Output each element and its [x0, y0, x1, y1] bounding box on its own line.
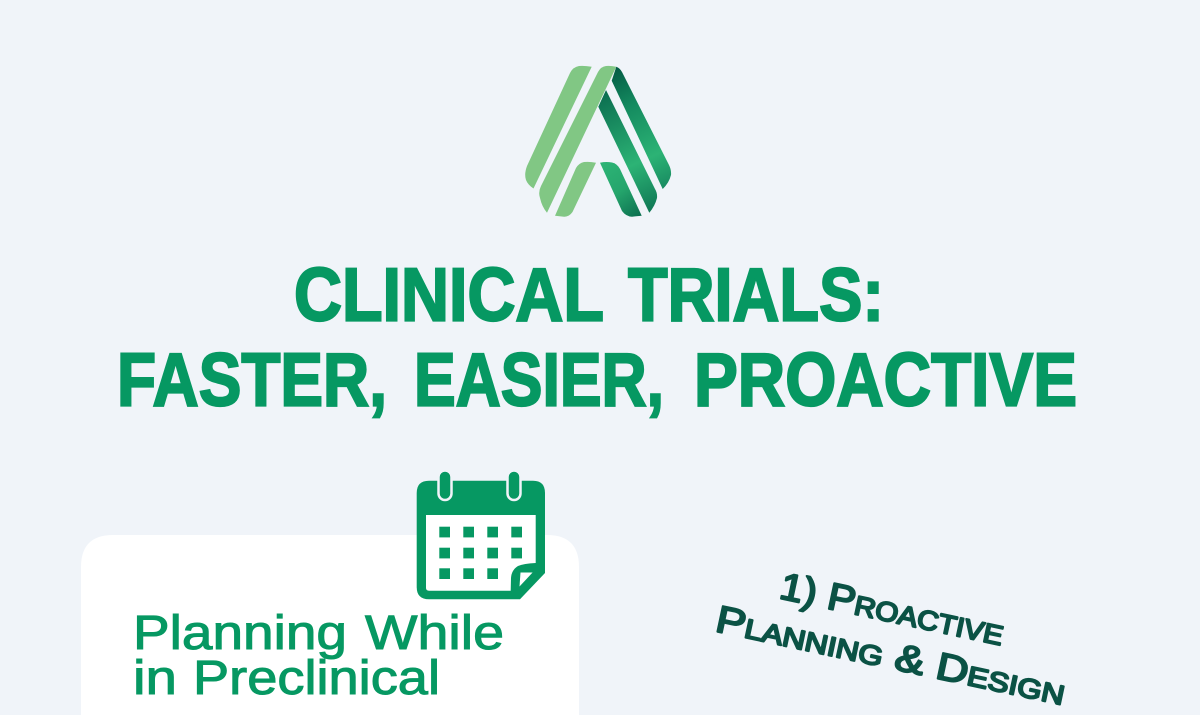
- title line 1: [294, 253, 884, 337]
- panel heading: Planning: [133, 607, 347, 660]
- panel heading: [133, 607, 504, 705]
- icon: calendar: [417, 470, 545, 599]
- calendar rings: [438, 470, 520, 500]
- note line 1: 1) Proactive: [776, 566, 1008, 654]
- panel heading: Preclinical: [193, 652, 440, 705]
- title line 1: TRIALS:: [628, 253, 884, 337]
- title line 2: FASTER,: [117, 338, 387, 422]
- logo: [525, 66, 671, 217]
- panel: planning while in preclinical: [81, 535, 579, 715]
- title line 2: PROACTIVE: [694, 338, 1077, 422]
- note line 2: Planning & Design: [712, 599, 1069, 714]
- handwritten note: proactive planning and design: [712, 566, 1069, 714]
- title: [117, 253, 1077, 422]
- panel heading: in: [133, 652, 177, 705]
- calendar date grid: [439, 527, 522, 579]
- panel heading: While: [365, 607, 504, 660]
- title line 2: EASIER,: [414, 338, 664, 422]
- title line 2: [117, 338, 1077, 422]
- title line 1: CLINICAL: [294, 253, 604, 337]
